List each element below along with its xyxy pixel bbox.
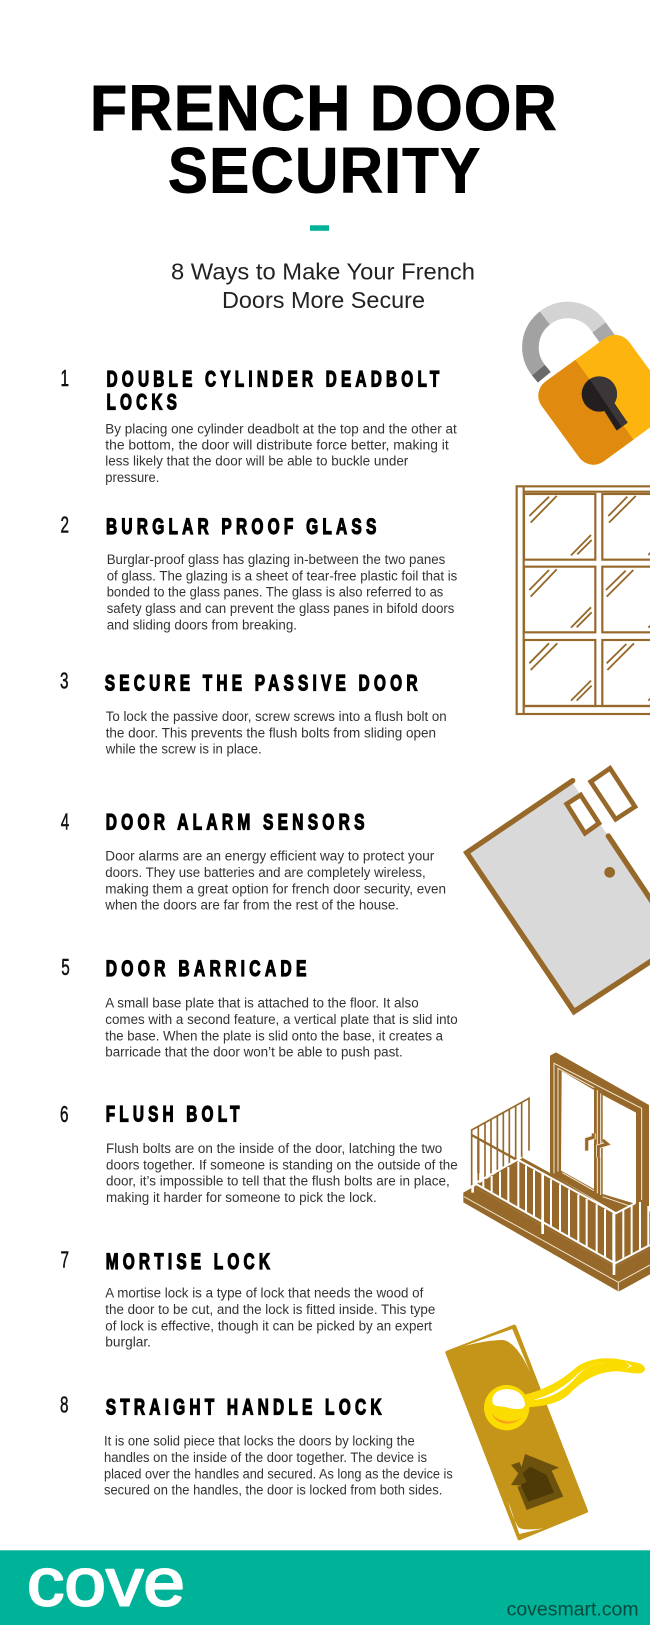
body text 1: By placing one cylinder deadbolt at the top and the other at (105, 421, 457, 437)
body text 2 (107, 552, 457, 633)
balcony slab (463, 1187, 650, 1292)
icon: door handle plate (447, 1327, 645, 1538)
body text 6 (106, 1141, 458, 1206)
number 7: 7 (60, 1246, 69, 1272)
step 2: burglar proof glass (60, 512, 457, 633)
footer band (0, 1544, 650, 1625)
body text 6: making it harder for someone to pick the lock. (106, 1190, 377, 1206)
house emblem (511, 1454, 563, 1510)
teal accent bar (310, 225, 329, 231)
number 2: 2 (60, 512, 69, 538)
step 8: straight handle lock (60, 1391, 453, 1498)
body text 4: doors. They use batteries and are completely wireless, (105, 865, 426, 881)
body text 8: It is one solid piece that locks the doors by locking the (104, 1434, 415, 1450)
body text 4 (104, 849, 446, 913)
icon: padlock (530, 310, 650, 472)
balustrade backing (474, 1157, 650, 1267)
website url: covesmart.com (507, 1600, 639, 1621)
body text 8: placed over the handles and secured. As long as the device is (104, 1466, 453, 1482)
heading 8: STRAIGHT HANDLE LOCK (106, 1394, 386, 1419)
heading 1: LOCKS (106, 389, 181, 414)
body text 2: of glass. The glazing is a sheet of tear-free plastic foil that is (107, 568, 457, 584)
body text 3 (105, 709, 447, 758)
title: SECURITY (168, 135, 482, 207)
side railing (472, 1098, 529, 1187)
heading 6: FLUSH BOLT (106, 1102, 244, 1127)
step 7: mortise lock (60, 1246, 435, 1351)
subtitle: 8 Ways to Make Your French (171, 258, 475, 284)
body text 2: Burglar-proof glass has glazing in-between the two panes (107, 552, 445, 568)
body text 3: the door. This prevents the flush bolts from sliding open (106, 725, 436, 741)
number 4: 4 (61, 808, 69, 834)
body text 6: Flush bolts are on the inside of the door, latching the two (106, 1141, 442, 1157)
heading 5: DOOR BARRICADE (106, 956, 311, 981)
lever handle (523, 1358, 645, 1407)
number 1: 1 (60, 365, 69, 391)
subtitle: Doors More Secure (222, 287, 425, 313)
body text 8: handles on the inside of the door together. The device is (104, 1450, 427, 1466)
body text 7: A mortise lock is a type of lock that needs the wood of (105, 1286, 423, 1302)
body text 5: comes with a second feature, a vertical plate that is slid into (105, 1012, 458, 1028)
icon: window panes (517, 486, 650, 714)
body text 1: pressure. (105, 470, 159, 486)
number 3: 3 (60, 668, 68, 694)
heading 7: MORTISE LOCK (106, 1249, 274, 1274)
body text 5 (105, 996, 458, 1060)
icon: door with alarm sensors (467, 768, 650, 1012)
body text 6: door, it’s impossible to tell that the flush bolts are in place, (106, 1174, 450, 1190)
title (90, 72, 558, 207)
body text 6: doors together. If someone is standing on the outside of the (106, 1157, 458, 1173)
body text 5: the base. When the plate is slid onto the base, it creates a (105, 1028, 443, 1044)
heading 2: BURGLAR PROOF GLASS (106, 514, 380, 539)
body text 2: safety glass and can prevent the glass panes in bifold doors (107, 601, 454, 617)
body text 2: and sliding doors from breaking. (107, 617, 297, 633)
number 8: 8 (60, 1391, 68, 1417)
body text 5: barricade that the door won’t be able to push past. (105, 1044, 403, 1060)
icon: balcony with french doors (463, 1052, 650, 1292)
step 1: double cylinder deadbolt locks (60, 365, 457, 486)
body text 8: secured on the handles, the door is locked from both sides. (104, 1482, 442, 1498)
heading 1: DOUBLE CYLINDER DEADBOLT (106, 367, 444, 392)
balustrade bars (473, 1157, 650, 1275)
heading 4: DOOR ALARM SENSORS (106, 809, 369, 834)
title: FRENCH DOOR (90, 72, 558, 144)
heading 1 (106, 367, 444, 414)
body text 7 (105, 1286, 435, 1351)
body text 1 (105, 421, 457, 486)
step 5: door barricade (61, 954, 458, 1060)
body text 8 (104, 1434, 453, 1498)
step 6: flush bolt (60, 1101, 458, 1206)
step 3: secure the passive door (60, 668, 447, 758)
logo: cove: cove (27, 1544, 185, 1620)
body text 2: bonded to the glass panes. The glass is also referred to as (107, 585, 443, 601)
body text 4: Door alarms are an energy efficient way to protect your (105, 849, 435, 865)
subtitle (171, 258, 475, 313)
body text 7: the door to be cut, and the lock is fitted inside. This type (105, 1302, 435, 1318)
body text 3: while the screw is in place. (105, 742, 262, 758)
number 6: 6 (60, 1101, 68, 1127)
body text 5: A small base plate that is attached to the floor. It also (105, 996, 419, 1012)
body text 7: burglar. (105, 1335, 151, 1351)
body text 1: the bottom, the door will distribute force better, making it (105, 438, 449, 454)
heading 3: SECURE THE PASSIVE DOOR (105, 670, 422, 695)
body text 4: making them a great option for french door security, even (105, 881, 446, 897)
door frame (550, 1052, 649, 1232)
body text 7: of lock is effective, though it can be picked by an expert (105, 1318, 432, 1334)
number 5: 5 (61, 954, 70, 980)
body text 3: To lock the passive door, screw screws into a flush bolt on (106, 709, 447, 725)
body text 4: when the doors are far from the rest of the house. (104, 897, 399, 913)
step 4: door alarm sensors (61, 808, 446, 913)
body text 1: less likely that the door will be able to buckle under (105, 454, 409, 470)
